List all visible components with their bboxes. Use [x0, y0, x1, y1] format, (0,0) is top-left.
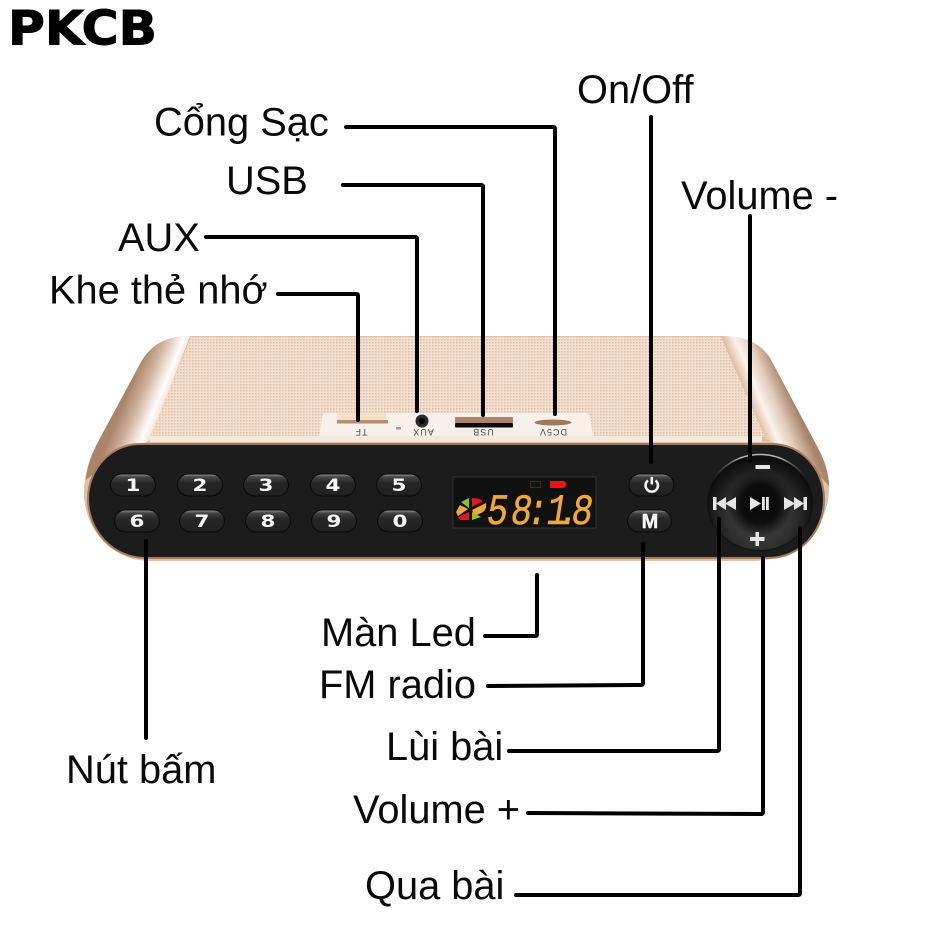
key 1 — [110, 474, 156, 496]
key 4 — [310, 474, 356, 496]
icon: previous — [713, 497, 736, 510]
key 5: 5 — [392, 475, 406, 495]
LED display — [453, 477, 596, 537]
key 9 — [312, 510, 356, 532]
colour wheel icon — [456, 498, 486, 520]
display digits: 58:1.8 — [487, 488, 593, 537]
AUX jack: AUX — [412, 427, 434, 437]
key 6: 6 — [130, 511, 144, 531]
black front panel — [88, 444, 824, 558]
icon: volume minus — [756, 465, 770, 469]
label: Lùi bài: Lùi bài — [386, 725, 503, 769]
status indicators — [530, 481, 566, 488]
label: USB: USB — [226, 159, 308, 203]
top edge strip — [150, 436, 762, 442]
M button — [628, 510, 672, 533]
key 6 — [114, 510, 160, 532]
icon: next — [784, 497, 807, 510]
label: FM radio: FM radio — [319, 663, 476, 707]
arrow: Volume + — [528, 558, 763, 814]
DC5V port — [534, 420, 572, 437]
power button — [629, 474, 674, 496]
key 2 — [178, 474, 222, 496]
USB port — [455, 417, 513, 437]
title: PKCB — [8, 2, 157, 56]
label: On/Off: On/Off — [577, 68, 694, 112]
arrow: AUX — [206, 237, 417, 411]
USB port: USB — [472, 427, 494, 437]
label: Volume +: Volume + — [353, 788, 520, 832]
key 8 — [246, 510, 290, 532]
display window — [453, 477, 596, 528]
AUX jack — [412, 414, 434, 437]
key 0: 0 — [393, 511, 407, 531]
number keypad — [110, 474, 422, 532]
speaker illustration — [84, 336, 829, 561]
label: Màn Led: Màn Led — [321, 611, 476, 655]
wheel highlight — [712, 454, 808, 483]
speaker mesh grille — [150, 337, 765, 437]
centre hub — [727, 471, 793, 537]
port panel — [319, 413, 593, 437]
arrow: Màn Led — [485, 575, 537, 636]
arrow: Volume - — [748, 216, 752, 461]
arrow: Cổng Sạc — [346, 127, 555, 414]
key 1: 1 — [126, 475, 140, 495]
TF card slot — [337, 413, 388, 437]
arrow: On/Off — [649, 117, 653, 462]
key 2: 2 — [193, 475, 207, 495]
key 7: 7 — [195, 511, 209, 531]
left end cap — [86, 336, 190, 480]
key 5 — [376, 474, 422, 496]
label: Cổng Sạc: Cổng Sạc — [154, 100, 329, 144]
media control wheel — [708, 454, 812, 550]
key 3: 3 — [259, 475, 273, 495]
label: Khe thẻ nhớ: Khe thẻ nhớ — [49, 268, 268, 312]
arrow: Nút bấm — [144, 541, 148, 738]
DC5V port: DC5V — [539, 427, 567, 437]
label: Qua bài: Qua bài — [365, 864, 504, 908]
icon: volume plus — [750, 532, 764, 546]
arrow: USB — [343, 185, 483, 415]
M button: M — [642, 511, 658, 533]
arrow: Lùi bài — [509, 519, 719, 751]
key 3 — [244, 474, 288, 496]
label: AUX: AUX — [118, 216, 200, 260]
arrow: Khe thẻ nhớ — [278, 294, 358, 420]
key 7 — [180, 510, 224, 532]
key 8: 8 — [261, 511, 275, 531]
key 0 — [378, 510, 422, 532]
icon: play pause — [750, 497, 769, 510]
key 9: 9 — [327, 511, 341, 531]
TF card slot: TF — [354, 427, 368, 437]
key 4: 4 — [326, 475, 340, 495]
right end cap — [721, 336, 829, 486]
arrow: FM radio — [488, 544, 643, 686]
wheel disc — [708, 454, 812, 550]
indicator light — [396, 427, 401, 430]
arrow: Qua bài — [516, 528, 800, 895]
speaker body rim — [84, 336, 829, 561]
label: Volume -: Volume - — [681, 174, 838, 218]
label: Nút bấm: Nút bấm — [66, 748, 216, 792]
